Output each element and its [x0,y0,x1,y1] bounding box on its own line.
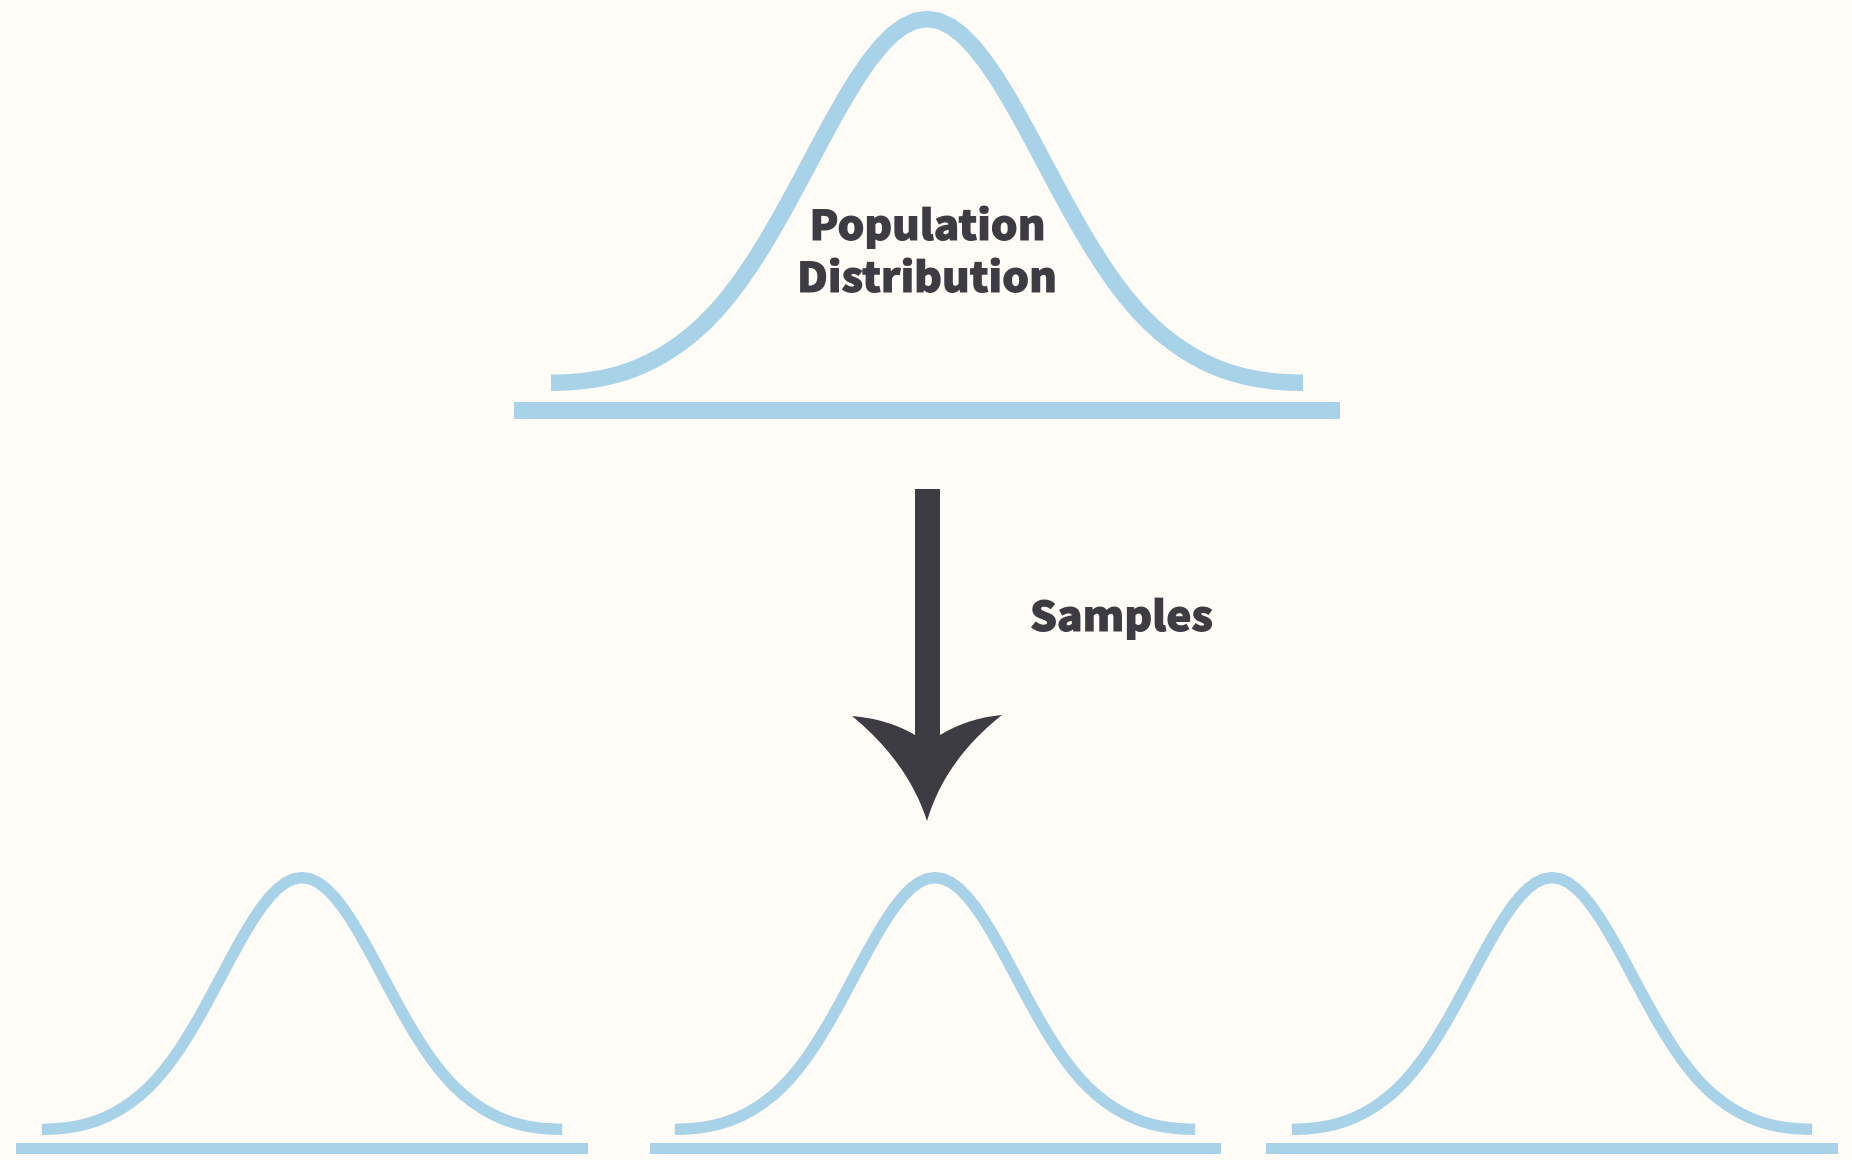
baseline: sample 2 [650,1143,1221,1154]
bell curve: sample 1 [42,878,562,1129]
arrow: sampling [852,489,1002,821]
bell curve: sample 2 [675,878,1195,1129]
panel: population distribution [514,19,1340,419]
panel: sample 1 [16,878,588,1154]
baseline: sample 3 [1266,1143,1838,1154]
baseline: sample 1 [16,1143,588,1154]
label: samples: Samples [1030,583,1213,643]
panel: sample 2 [650,878,1221,1154]
baseline: population [514,402,1340,419]
bell curve: population [551,19,1303,383]
heading: population distribution: Distribution [797,244,1057,304]
bell curve: sample 3 [1292,878,1812,1129]
panel: sample 3 [1266,878,1838,1154]
heading: population distribution [797,192,1057,304]
heading: population distribution: Population [810,192,1046,252]
